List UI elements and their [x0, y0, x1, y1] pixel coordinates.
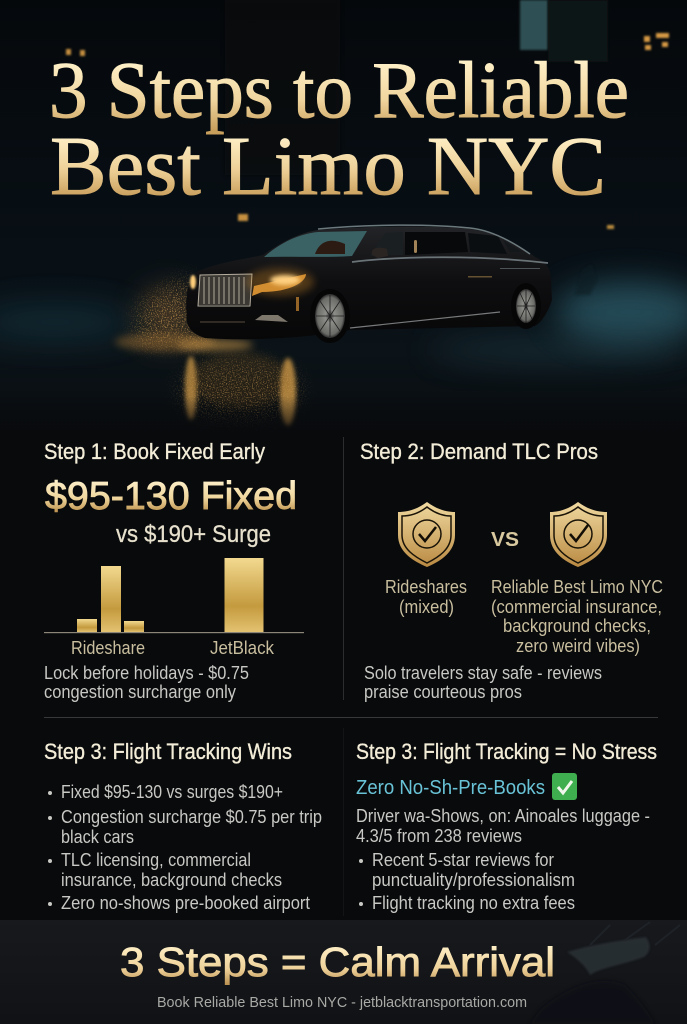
- step 1 note: congestion surcharge only: [44, 682, 236, 702]
- step 2 note: praise courteous pros: [364, 682, 522, 702]
- surge comparison: vs $190+ Surge: [116, 521, 271, 548]
- reliable best limo label: (commercial insurance,: [491, 597, 662, 617]
- title: [49, 47, 629, 213]
- icon: limo shield: [550, 502, 607, 567]
- driver note: Driver wa-Shows, on: Ainoales luggage -: [356, 806, 650, 826]
- bullet list: black cars: [61, 827, 134, 847]
- reliable best limo label: [491, 577, 663, 656]
- step 2 note: Solo travelers stay safe - reviews: [364, 663, 602, 683]
- bar chart: rideshare vs jetblack: Rideshare: [71, 638, 145, 658]
- heading: step 3 left: Step 3: Flight Tracking Wins: [44, 739, 292, 764]
- review bullets: Flight tracking no extra fees: [372, 893, 575, 913]
- title: 3 Steps to Reliable: [49, 47, 629, 135]
- bar chart: rideshare vs jetblack: [44, 558, 304, 658]
- bullet list: Fixed $95-130 vs surges $190+: [61, 782, 283, 802]
- heading: step 3 right: Step 3: Flight Tracking = No Stress: [356, 739, 657, 764]
- versus label: VS: [491, 529, 519, 551]
- bar chart: rideshare vs jetblack: JetBlack: [210, 638, 275, 658]
- bullet list: TLC licensing, commercial: [61, 850, 251, 870]
- panel: step 2 demand tlc pros: [360, 439, 663, 702]
- panel: step 1 book fixed early: [44, 439, 304, 702]
- reliable best limo label: zero weird vibes): [516, 636, 640, 656]
- highlighted subheading: Zero No-Sh-Pre-Books: [356, 777, 545, 799]
- step 1 note: [44, 663, 249, 702]
- reliable best limo label: Reliable Best Limo NYC: [491, 577, 663, 597]
- rideshares label: [385, 577, 467, 617]
- review bullets: Recent 5-star reviews for: [372, 850, 554, 870]
- step 2 note: [364, 663, 602, 702]
- reliable best limo label: background checks,: [503, 616, 651, 636]
- step 1 note: Lock before holidays - $0.75: [44, 663, 249, 683]
- review bullets: punctuality/professionalism: [372, 870, 575, 890]
- driver note: [356, 806, 650, 846]
- price headline: $95-130 Fixed: [45, 475, 297, 518]
- footer headline: 3 Steps = Calm Arrival: [120, 939, 555, 985]
- footer banner: [0, 920, 687, 1024]
- bullet list: [48, 782, 322, 913]
- panel: step 3 flight tracking wins: [44, 739, 322, 913]
- heading: step 2: Step 2: Demand TLC Pros: [360, 439, 598, 464]
- bullet list: Congestion surcharge $0.75 per trip: [61, 807, 322, 827]
- heading: step 1: Step 1: Book Fixed Early: [44, 439, 265, 464]
- lower content background: [0, 438, 687, 920]
- review bullets: [359, 850, 575, 913]
- icon: rideshare shield: [398, 502, 455, 567]
- illustration: black limousine with glowing headlights: [186, 225, 552, 343]
- bullet list: insurance, background checks: [61, 870, 282, 890]
- title: Best Limo NYC: [50, 120, 606, 213]
- footer call to action: Book Reliable Best Limo NYC - jetblacktransportation.com: [157, 994, 527, 1011]
- icon: green check: [552, 773, 577, 800]
- panel: step 3 no stress: [356, 739, 657, 913]
- bullet list: Zero no-shows pre-booked airport: [61, 893, 310, 913]
- rideshares label: Rideshares: [385, 577, 467, 597]
- background: rainy city street scene: [0, 0, 687, 440]
- driver note: 4.3/5 from 238 reviews: [356, 826, 522, 846]
- decorative car silhouette: [530, 922, 680, 1024]
- rideshares label: (mixed): [399, 597, 454, 617]
